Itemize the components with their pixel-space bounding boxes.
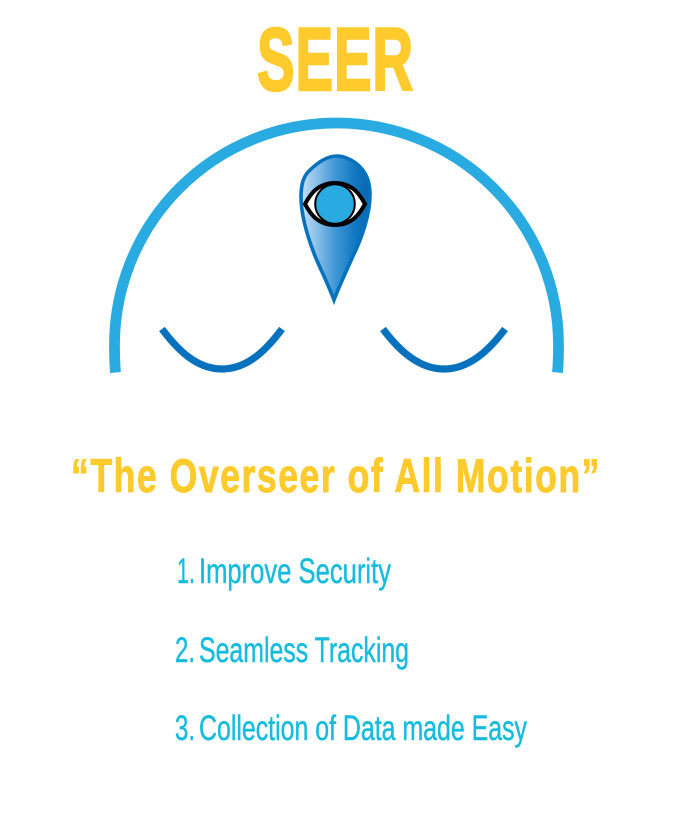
location pin with eye: [301, 156, 370, 300]
head arc: [114, 123, 558, 372]
face logo: [114, 123, 558, 372]
right closed eye: [383, 329, 505, 369]
item 1: 1.: [177, 552, 195, 591]
item 1: [177, 552, 391, 591]
eye outline: [305, 183, 365, 225]
item 3: Collection of Data made Easy: [199, 709, 527, 748]
item 2: [175, 631, 409, 670]
item 3: 3.: [175, 709, 195, 748]
left closed eye: [162, 329, 282, 369]
item 1: Improve Security: [199, 552, 391, 591]
item 2: Seamless Tracking: [199, 631, 409, 670]
item 2: 2.: [175, 631, 195, 670]
list of benefits: [175, 552, 527, 748]
pin body: [301, 156, 370, 300]
item 3: [175, 709, 527, 748]
iris: [315, 184, 355, 224]
title: SEER: [257, 9, 414, 109]
